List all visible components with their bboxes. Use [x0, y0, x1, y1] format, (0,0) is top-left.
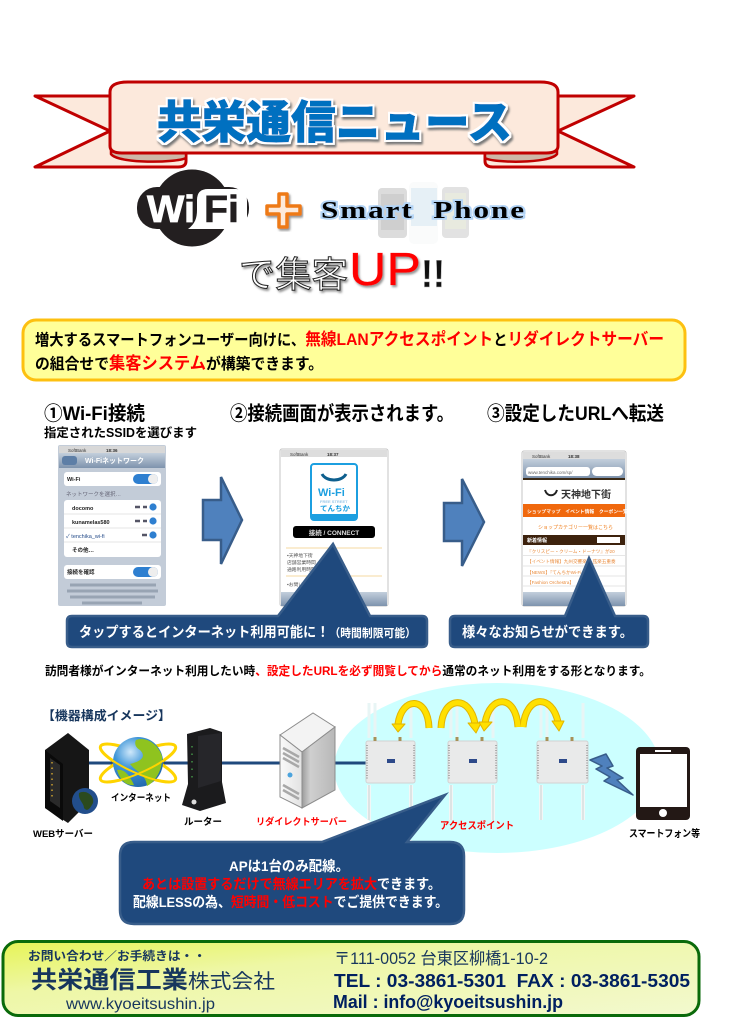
phone screen 3: redirected site: ショップマップ イベント情報 クーポン一覧 — [527, 508, 628, 515]
phone screen 1: Wi-Fi settings: その他… — [72, 546, 94, 554]
step 1 heading: 指定されたSSIDを選びます — [44, 425, 197, 440]
phone screen 3: redirected site: 【Fashion Orchestra】 — [527, 580, 574, 585]
label: redirect server: リダイレクトサーバー — [256, 816, 347, 828]
intro text line 2: の組合せで集客システムが構築できます。 — [35, 353, 323, 373]
callout line 2: あとは設置するだけで無線エリアを拡大できます。 — [142, 876, 441, 892]
phone screen 2: connect page: FREE STREET — [320, 499, 348, 504]
phone screen 2: connect page: てんちか — [320, 504, 350, 513]
network cable — [85, 762, 366, 764]
phone screen 3: redirected site — [522, 451, 628, 606]
label: router: ルーター — [184, 816, 222, 828]
phone screen 2: connect page — [280, 449, 388, 606]
label: web server: WEBサーバー — [33, 829, 93, 840]
callout line 3: 配線LESSの為、短時間・低コストでご提供できます。 — [133, 894, 448, 910]
headline: で集客UP!! — [239, 243, 445, 296]
Smart Phone wordmark: Smart Phone — [321, 198, 526, 224]
visitor explanation text: 訪問者様がインターネット利用したい時、設定したURLを必ず閲覧してから通常のネット利用をする形となります。 — [45, 663, 651, 678]
phone screen 2: connect page: 店舗営業時間 — [287, 559, 316, 566]
section label: equipment diagram: 【機器構成イメージ】 — [42, 708, 171, 723]
label: internet: インターネット — [111, 792, 171, 804]
callout line 1: APは1台のみ配線。 — [229, 858, 349, 874]
icon: faded smartphones — [378, 182, 469, 244]
phone screen 3: redirected site: 『クリスピー・クリーム・ドーナツ』が20 — [527, 548, 615, 555]
arrow: step 1 to 2 — [203, 477, 242, 564]
headline: で集客UP!!: UP — [349, 243, 421, 295]
step 3 heading: ③設定したURLへ転送 — [487, 403, 664, 425]
icon: redirect server — [280, 713, 335, 808]
website: www.kyoeitsushin.jp — [65, 996, 215, 1013]
label: access point: アクセスポイント — [440, 820, 514, 832]
callout: announcements — [450, 558, 648, 647]
phone screen 2: connect page: SoftBank — [290, 452, 309, 457]
phone screen 3: redirected site: 【NEWS】『てんちかWi-Fi』 — [527, 569, 586, 576]
label: smartphone: スマートフォン等 — [629, 827, 700, 840]
phone screen 3: redirected site: 新着情報 — [527, 537, 547, 544]
coverage area ellipse — [334, 683, 660, 853]
company name: 共栄通信工業 株式会社 — [31, 967, 275, 994]
title: 共栄通信ニュース — [157, 97, 512, 148]
phone screen 3: redirected site: 天神地下街 — [561, 488, 611, 501]
phone screen 2: connect page: 接続 / CONNECT — [309, 528, 359, 537]
access point 1 — [366, 703, 415, 820]
phone screen 1: Wi-Fi settings: 接続を確認 — [67, 568, 95, 576]
phone screen 3: redirected site: www.tenchika.com/sp/ — [528, 470, 573, 475]
phone screen 1: Wi-Fi settings: Wi-Fiネットワーク — [85, 456, 144, 465]
phone screen 1: Wi-Fi settings: 18:36 — [106, 448, 118, 453]
phone screen 3: redirected site: 18:38 — [568, 454, 580, 459]
phone screen 3: redirected site: 【イベント情報】九州交響楽団 弦楽五重奏 — [527, 558, 616, 565]
phone screen 1: Wi-Fi settings: Wi-Fi — [67, 477, 81, 483]
icon: Wi-Fi logo: Fi — [204, 189, 239, 231]
headline: で集客UP!!: で集客 — [239, 254, 348, 295]
callout: tap to connect: タップするとインターネット利用可能に！（時間制限可能） — [79, 624, 416, 640]
phone and fax: TEL : 03-3861-5301 FAX : 03-3861-5305 — [334, 970, 690, 991]
address: 〒111-0052 台東区柳橋1-10-2 — [334, 949, 548, 968]
phone screen 1: Wi-Fi settings: ✓ tenchika_wi-fi — [66, 533, 105, 540]
step 1 heading: ①Wi-Fi接続 — [44, 403, 145, 425]
step 1 heading — [44, 403, 197, 440]
callout: tap to connect — [67, 544, 427, 647]
panel: intro message — [23, 320, 685, 380]
email: Mail : info@kyoeitsushin.jp — [333, 991, 563, 1012]
arrow: step 2 to 3 — [444, 479, 484, 566]
step 2 heading: ②接続画面が表示されます。 — [230, 402, 454, 425]
phone screen 2: connect page: ▪お問い合わせ — [287, 581, 318, 588]
icon: router — [182, 728, 226, 811]
phone screen 2: connect page: ▪天神地下街 — [287, 552, 313, 559]
phone screen 2: connect page: 18:37 — [327, 452, 339, 457]
icon: internet globe — [96, 737, 180, 789]
phone screen 1: Wi-Fi settings: kunamelas580 — [72, 520, 110, 526]
access point 3 — [537, 703, 588, 820]
banner ribbon — [35, 82, 634, 167]
icon: web server — [45, 733, 98, 823]
icon: smartphone — [636, 747, 690, 820]
phone screen 1: Wi-Fi settings: docomo — [72, 506, 94, 512]
icon: Wi-Fi logo — [137, 170, 249, 246]
phone screen 1: Wi-Fi settings — [58, 445, 166, 606]
icon: Wi-Fi logo: Wi — [147, 189, 195, 231]
connecting line to access point — [336, 762, 366, 764]
icon: lightning bolt — [590, 754, 633, 795]
arrows: wireless mesh hops — [392, 702, 564, 733]
callout: AP wiring benefits — [120, 795, 464, 924]
phone screen 3: redirected site: SoftBank — [532, 454, 551, 459]
callout: announcements: 様々なお知らせができます。 — [462, 624, 633, 640]
phone screen 2: connect page: 通路利用時間 — [287, 566, 316, 573]
intro text line 1: 増大するスマートフォンユーザー向けに、無線LANアクセスポイントとリダイレクトサーバー — [35, 329, 664, 349]
icon: access points — [366, 703, 588, 820]
headline: で集客UP!!: !! — [421, 253, 445, 296]
panel: company contact footer — [3, 942, 699, 1016]
phone screen 2: connect page: Wi-Fi — [318, 487, 345, 499]
phone screen 1: Wi-Fi settings: SoftBank — [68, 448, 87, 453]
phone screen 1: Wi-Fi settings: ネットワークを選択… — [66, 490, 121, 498]
access point 2 — [448, 703, 497, 820]
phone screen 3: redirected site: ショップカテゴリー一覧はこちら — [538, 524, 613, 531]
icon: orange plus — [267, 194, 300, 227]
inquiry label: お問い合わせ／お手続きは・・ — [28, 948, 206, 963]
